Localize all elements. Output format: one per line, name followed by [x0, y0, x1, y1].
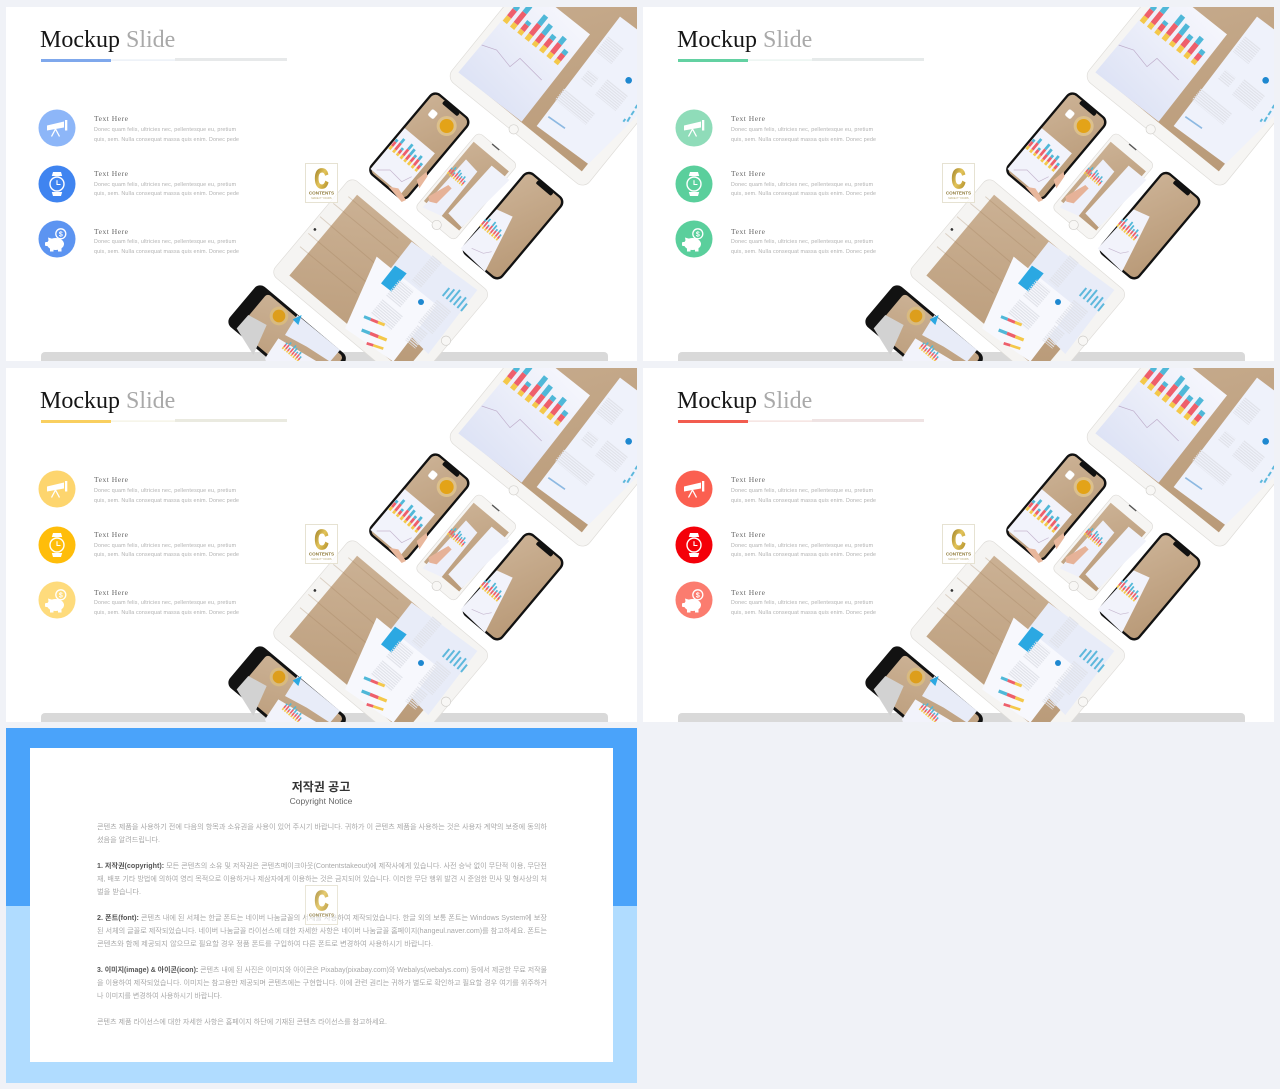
logo watermark: CONTENTS: [946, 190, 971, 196]
text block 3: Text Here: [731, 227, 766, 236]
text block 2: Text Here: [94, 169, 129, 178]
text block 1: quis, sem. Nulla consequat massa quis enim. Donec pede: [731, 498, 876, 504]
logo watermark: MAKE IT YOURS: [948, 557, 969, 561]
title underline: [678, 58, 924, 62]
icon: piggy bank: $: [696, 592, 700, 599]
section 3: image and icon: 나 이미지를 변경하여 사용하시기 바랍니다.: [97, 991, 222, 1000]
text block 3: Text Here: [94, 588, 129, 597]
section 1: copyright: 재, 배포 기타 방법에 의하여 영리 목적으로 이용하거나 제삼자에게 이용하는 것은 금지되어 있습니다. 이러한 무단 행위 발견 시 준엄한 민사 및 형사상의 처: [97, 874, 547, 883]
text block 2: Text Here: [94, 530, 129, 539]
text block 3: Donec quam felis, ultricies nec, pellentesque eu, pretium: [731, 239, 874, 245]
icon: piggy bank: [38, 582, 76, 618]
title: Mockup Slide: [677, 388, 812, 414]
logo watermark: [306, 524, 338, 564]
section 1: copyright: [97, 861, 547, 896]
text block 1: [94, 475, 239, 504]
icon: telescope: [676, 470, 712, 508]
text block 2: [731, 530, 876, 558]
text block 2: Donec quam felis, ultricies nec, pellentesque eu, pretium: [731, 182, 874, 188]
text block 1: Donec quam felis, ultricies nec, pellentesque eu, pretium: [94, 488, 237, 494]
panel: blue mockup slide: [6, 7, 637, 361]
logo watermark: [942, 524, 974, 564]
heading: 저작권 공고: [292, 779, 350, 794]
icon: piggy bank: [676, 220, 712, 258]
logo watermark: MAKE IT YOURS: [948, 196, 969, 200]
text block 3: [94, 588, 239, 616]
icon: watch: [676, 526, 712, 564]
logo watermark: C: [314, 524, 328, 555]
text block 1: Text Here: [94, 475, 129, 484]
text block 2: [94, 530, 239, 558]
title underline: [41, 58, 287, 62]
icon: telescope: [38, 470, 76, 508]
icon: watch: [38, 526, 76, 564]
icon: telescope: [676, 110, 712, 146]
device mockups: [225, 0, 738, 398]
section 2: font: [97, 913, 548, 948]
device mockups: [862, 0, 1280, 398]
section 2: font: 된 서체의 글꼴로 제작되었습니다. 네이버 나눔글꼴 라이선스에 대한 자세한 사항은 네이버 나눔글꼴 홈페이지(hangeul.naver.com)를 참고하세요. 폰트는: [97, 926, 548, 935]
device mockups: [862, 248, 1280, 759]
logo watermark: MAKE IT YOURS: [311, 196, 332, 200]
text block 3: quis, sem. Nulla consequat massa quis enim. Donec pede: [731, 249, 876, 255]
logo watermark: CONTENTS: [946, 552, 971, 556]
icon: piggy bank: [38, 220, 76, 258]
text block 3: Text Here: [731, 588, 766, 597]
footer bar: [678, 713, 1245, 727]
logo watermark: CONTENTS: [309, 912, 334, 918]
text block 1: [94, 114, 239, 143]
text block 2: quis, sem. Nulla consequat massa quis enim. Donec pede: [731, 191, 876, 197]
logo watermark: CONTENTS: [309, 190, 334, 196]
text block 2: Donec quam felis, ultricies nec, pellentesque eu, pretium: [94, 543, 237, 549]
text block 1: Text Here: [94, 114, 129, 123]
panel: green mockup slide: [643, 7, 1274, 361]
text block 1: [731, 475, 876, 504]
logo watermark: C: [952, 524, 966, 555]
logo watermark: CONTENTS: [309, 552, 334, 556]
device mockups: [225, 248, 738, 759]
logo watermark: [306, 885, 338, 924]
text block 3: Donec quam felis, ultricies nec, pellentesque eu, pretium: [731, 600, 874, 606]
text block 2: quis, sem. Nulla consequat massa quis enim. Donec pede: [731, 552, 876, 558]
text block 1: quis, sem. Nulla consequat massa quis enim. Donec pede: [731, 137, 876, 143]
text block 3: [731, 227, 876, 255]
section 2: font: 콘텐츠와 함께 제공되지 않으므로 필요할 경우 정품 폰트를 구입하여 다른 폰트로 변경하여 사용하시기 바랍니다.: [97, 939, 433, 948]
intro paragraph: 콘텐츠 제품을 사용하기 전에 다음의 항목과 소유권을 사용이 있어 주시기 바랍니다. 귀하가 이 콘텐츠 제품을 사용하는 것은 사용자 계약의 보증에 동의하: [97, 822, 548, 831]
text block 2: quis, sem. Nulla consequat massa quis enim. Donec pede: [94, 552, 239, 558]
text block 3: quis, sem. Nulla consequat massa quis enim. Donec pede: [731, 610, 876, 616]
text block 3: quis, sem. Nulla consequat massa quis enim. Donec pede: [94, 610, 239, 616]
section 1: copyright: 벌을 받습니다.: [97, 887, 141, 896]
title: Mockup Slide: [40, 27, 175, 53]
text block 2: Donec quam felis, ultricies nec, pellentesque eu, pretium: [731, 543, 874, 549]
section 3: image and icon: 을 이용하여 제작되었습니다. 이미지는 참고용만 제공되며 콘텐츠에는 구현합니다. 이에 관련 권리는 귀하가 별도로 확인하고 필요할 경우 여기를 위주하거: [97, 978, 547, 987]
icon: piggy bank: $: [696, 231, 700, 238]
title: Mockup Slide: [40, 388, 175, 414]
icon: piggy bank: $: [59, 231, 63, 238]
section 3: image and icon: 3. 이미지(image) & 아이콘(icon): 콘텐츠 내에 된 사진은 이미지와 아이콘은 Pixabay(pixabay.com)와 Webalys(webalys.com) 등에서 제공한 무료 저작물: [97, 965, 548, 974]
footer bar: [41, 352, 608, 366]
section 3: image and icon: [97, 965, 548, 1000]
title underline: [678, 419, 924, 423]
text block 3: [94, 227, 239, 255]
text block 1: Text Here: [731, 475, 766, 484]
text block 3: quis, sem. Nulla consequat massa quis enim. Donec pede: [94, 249, 239, 255]
icon: piggy bank: [676, 582, 712, 618]
intro paragraph: 셨음을 알려드립니다.: [97, 835, 160, 844]
text block 1: Text Here: [731, 114, 766, 123]
text block 2: [731, 169, 876, 197]
section 1: copyright: 1. 저작권(copyright): 모든 콘텐츠의 소유 및 저작권은 콘텐츠메이크아웃(Contentstakeout)에 제작사에게 있습니다. 사전 승낙 없이 무단적 이용, 무단전: [97, 861, 547, 870]
text block 3: Donec quam felis, ultricies nec, pellentesque eu, pretium: [94, 600, 237, 606]
panel: copyright notice: [6, 728, 637, 1083]
logo watermark: MAKE IT YOURS: [311, 557, 332, 561]
text block 2: Text Here: [731, 169, 766, 178]
panel: red mockup slide: [643, 368, 1274, 722]
text block 1: Donec quam felis, ultricies nec, pellentesque eu, pretium: [94, 127, 237, 133]
intro paragraph: [97, 822, 548, 844]
closing note: 콘텐츠 제품 라이선스에 대한 자세한 사항은 홈페이지 하단에 기재된 콘텐츠 라이선스를 참고하세요.: [97, 1017, 387, 1026]
subheading: Copyright Notice: [290, 796, 353, 806]
text block 1: [731, 114, 876, 143]
text block 3: Donec quam felis, ultricies nec, pellentesque eu, pretium: [94, 239, 237, 245]
footer bar: [41, 713, 608, 727]
logo watermark: C: [314, 163, 328, 194]
text block 2: quis, sem. Nulla consequat massa quis enim. Donec pede: [94, 191, 239, 197]
logo watermark: [942, 163, 974, 202]
footer bar: [678, 352, 1245, 366]
text block 2: Donec quam felis, ultricies nec, pellentesque eu, pretium: [94, 182, 237, 188]
icon: watch: [38, 166, 76, 202]
title underline: [41, 419, 287, 423]
text block 1: quis, sem. Nulla consequat massa quis enim. Donec pede: [94, 137, 239, 143]
text block 1: Donec quam felis, ultricies nec, pellentesque eu, pretium: [731, 488, 874, 494]
panel: yellow mockup slide: [6, 368, 637, 722]
text block 1: Donec quam felis, ultricies nec, pellentesque eu, pretium: [731, 127, 874, 133]
title: Mockup Slide: [677, 27, 812, 53]
icon: watch: [676, 166, 712, 202]
section 2: font: 2. 폰트(font): 콘텐츠 내에 된 서체는 한글 폰트는 네이버 나눔글꼴의 서체를 사용하여 제작되었습니다. 한글 외의 보통 폰트는 Windows System에 보장: [97, 913, 548, 922]
text block 1: quis, sem. Nulla consequat massa quis enim. Donec pede: [94, 498, 239, 504]
logo watermark: C: [314, 885, 328, 916]
text block 2: [94, 169, 239, 197]
text block 2: Text Here: [731, 530, 766, 539]
logo watermark: C: [952, 163, 966, 194]
icon: telescope: [38, 110, 76, 146]
logo watermark: [306, 163, 338, 202]
text block 3: Text Here: [94, 227, 129, 236]
text block 3: [731, 588, 876, 616]
icon: piggy bank: $: [59, 592, 63, 599]
